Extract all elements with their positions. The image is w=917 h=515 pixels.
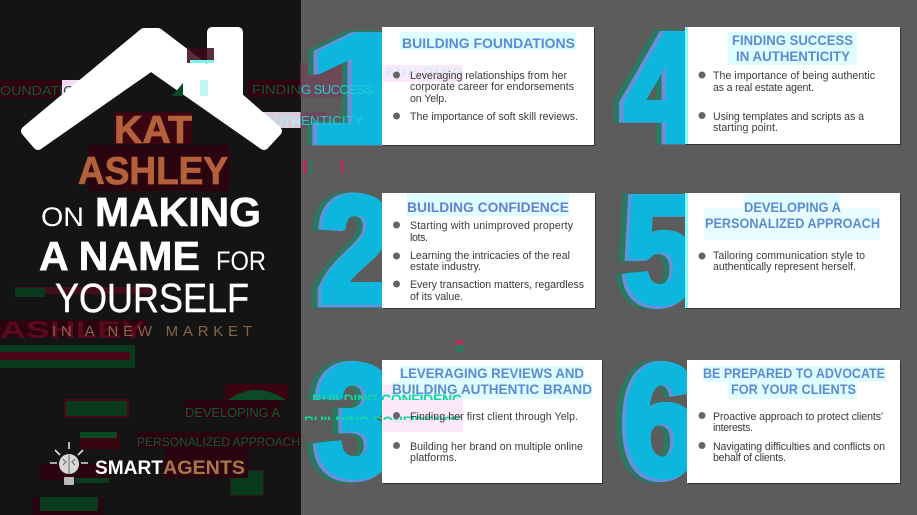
panel: card 2 building confidence [382, 193, 596, 309]
glitch ghost text: over number 1: G SUCCESS [301, 82, 373, 97]
heading: main title: MAKING [95, 189, 261, 235]
heading: IN AUTHENTICITY [736, 48, 851, 64]
logo wordmark: AGENTS [163, 458, 245, 479]
heading [705, 199, 880, 231]
glitch ghost text: clipped strips: BUILDING CONFIDENC [312, 391, 462, 407]
number 1: 1 [308, 2, 422, 175]
number 6: 6 [623, 332, 700, 509]
number 5 [616, 193, 685, 310]
heading: LEVERAGING REVIEWS AND [400, 365, 584, 381]
bullet list: Finding her first client through Yelp. [410, 411, 578, 423]
heading: BE PREPARED TO ADVOCATE [703, 365, 885, 381]
glitch blocks above card 3 [455, 340, 463, 352]
number 3: 3 [308, 332, 387, 512]
ghost text: BUILDING [386, 65, 462, 79]
heading: main title: YOURSELF [55, 275, 249, 321]
glitch ghost text: finding success: IN AUTH [249, 114, 301, 129]
bullet list [393, 220, 584, 303]
glitch ghost blocks: lower left [0, 287, 155, 515]
bullet list: starting point. [713, 122, 778, 134]
number 1: 1 [304, 2, 418, 175]
logo wordmark: SMART [95, 458, 163, 479]
number 5: 5 [621, 163, 695, 337]
number 1 [307, 30, 383, 146]
panel: card 1 building foundations [382, 27, 595, 146]
glitch ghost text: over number 1 [301, 82, 373, 174]
bullet list [393, 411, 583, 464]
glitch ghost text: developing a personalized approach: PERSONALIZED APPROACH [137, 435, 300, 449]
heading: main title: FOR [216, 246, 266, 276]
glitch ghost text: developing a personalized approach [137, 384, 301, 496]
heading: FINDING SUCCESS [732, 32, 853, 48]
bullet list: Leveraging relationships from her [410, 70, 567, 82]
panel: card 3 leveraging reviews [304, 360, 603, 484]
bullet list: Every transaction matters, regardless [410, 279, 584, 291]
bullet list: on Yelp. [410, 93, 447, 105]
glitch ghost blocks behind number 1 [300, 63, 344, 128]
number 3 [306, 360, 382, 484]
glitch ghost text: finding success: FINDIN [252, 82, 301, 97]
bullet list: The importance of soft skill reviews. [410, 111, 578, 123]
number 3: 3 [313, 332, 392, 512]
bullet list [698, 411, 885, 464]
number 4: 4 [624, 1, 700, 174]
panel: card 5 developing approach [685, 193, 901, 309]
heading: guest name: ASHLEY [78, 150, 228, 193]
number 1: 1 [300, 1, 414, 174]
bullet list: Building her brand on multiple online [410, 441, 583, 453]
glitch ghost text: finding success [248, 80, 301, 129]
bullet list: The importance of being authentic [713, 70, 876, 82]
heading [703, 365, 885, 397]
bullet list: Starting with unimproved property [410, 220, 574, 232]
bullet list [698, 250, 865, 273]
bullet list: authentically represent herself. [713, 261, 856, 273]
number 4 [613, 29, 686, 144]
glitch ghost text: foundations: OUNDATIONS [0, 83, 94, 98]
bullet list: Tailoring communication style to [713, 250, 865, 262]
heading [392, 365, 592, 397]
bullet list: of its value. [410, 291, 463, 303]
heading: guest name [78, 109, 230, 193]
number 5: 5 [616, 163, 690, 337]
panel: card 4 finding success [685, 27, 901, 145]
bullet list: corporate career for endorsements [410, 81, 574, 93]
number 6 [616, 360, 687, 484]
number 6: 6 [615, 331, 692, 511]
panel: card 6 be prepared [687, 360, 901, 484]
glitch ghost text: clipped strips [304, 394, 462, 420]
heading: BUILDING AUTHENTIC BRAND [392, 381, 592, 397]
bullet list: Navigating difficulties and conflicts on [713, 441, 885, 453]
subtitle: IN A NEW MARKET [52, 323, 252, 340]
bullet list: behalf of clients. [713, 452, 786, 464]
heading: main title: A NAME [39, 233, 200, 279]
bullet list: as a real estate agent. [713, 82, 814, 94]
number 4: 4 [620, 1, 696, 174]
bullet list [393, 70, 578, 123]
glitch ghost blocks: lower left: ASHLEY [0, 317, 145, 344]
heading: DEVELOPING A [744, 199, 841, 215]
logo wordmark [95, 458, 248, 479]
number 2 [312, 192, 383, 308]
icon: house roof [26, 32, 277, 145]
heading [732, 32, 853, 64]
number 3: 3 [316, 332, 395, 509]
heading: BUILDING CONFIDENCE [407, 199, 569, 215]
heading: guest name: KAT [114, 109, 192, 152]
heading: PERSONALIZED APPROACH [705, 215, 880, 231]
heading: FOR YOUR CLIENTS [731, 381, 856, 397]
heading: BUILDING FOUNDATIONS [402, 35, 575, 51]
number 4: 4 [615, 0, 691, 173]
bullet list: estate industry. [410, 261, 481, 273]
bullet list: lots. [410, 232, 428, 244]
bullet list: interests. [713, 422, 753, 434]
number 6: 6 [620, 331, 697, 511]
heading: main title [39, 189, 266, 321]
panel: left title panel [0, 0, 301, 515]
glitch ghost text: clipped strips: BUILDING CONFIDENCE [304, 413, 462, 429]
bullet list: platforms. [410, 452, 457, 464]
glitch ghost text: developing a personalized approach: DEVELOPING A [185, 405, 280, 420]
bullet list: Proactive approach to protect clients' [713, 411, 883, 423]
icon: brain light bulb [50, 442, 88, 485]
number 5: 5 [624, 166, 698, 335]
heading: main title: ON [41, 202, 84, 232]
bullet list [698, 70, 876, 134]
number 2: 2 [311, 164, 387, 337]
bullet list: Learning the intricacies of the real [410, 250, 570, 262]
number 2: 2 [316, 164, 392, 337]
bullet list: Using templates and scripts as a [713, 111, 864, 123]
number 2: 2 [319, 165, 395, 335]
glitch ghost text: over number 1: ENTICITY [301, 113, 363, 128]
